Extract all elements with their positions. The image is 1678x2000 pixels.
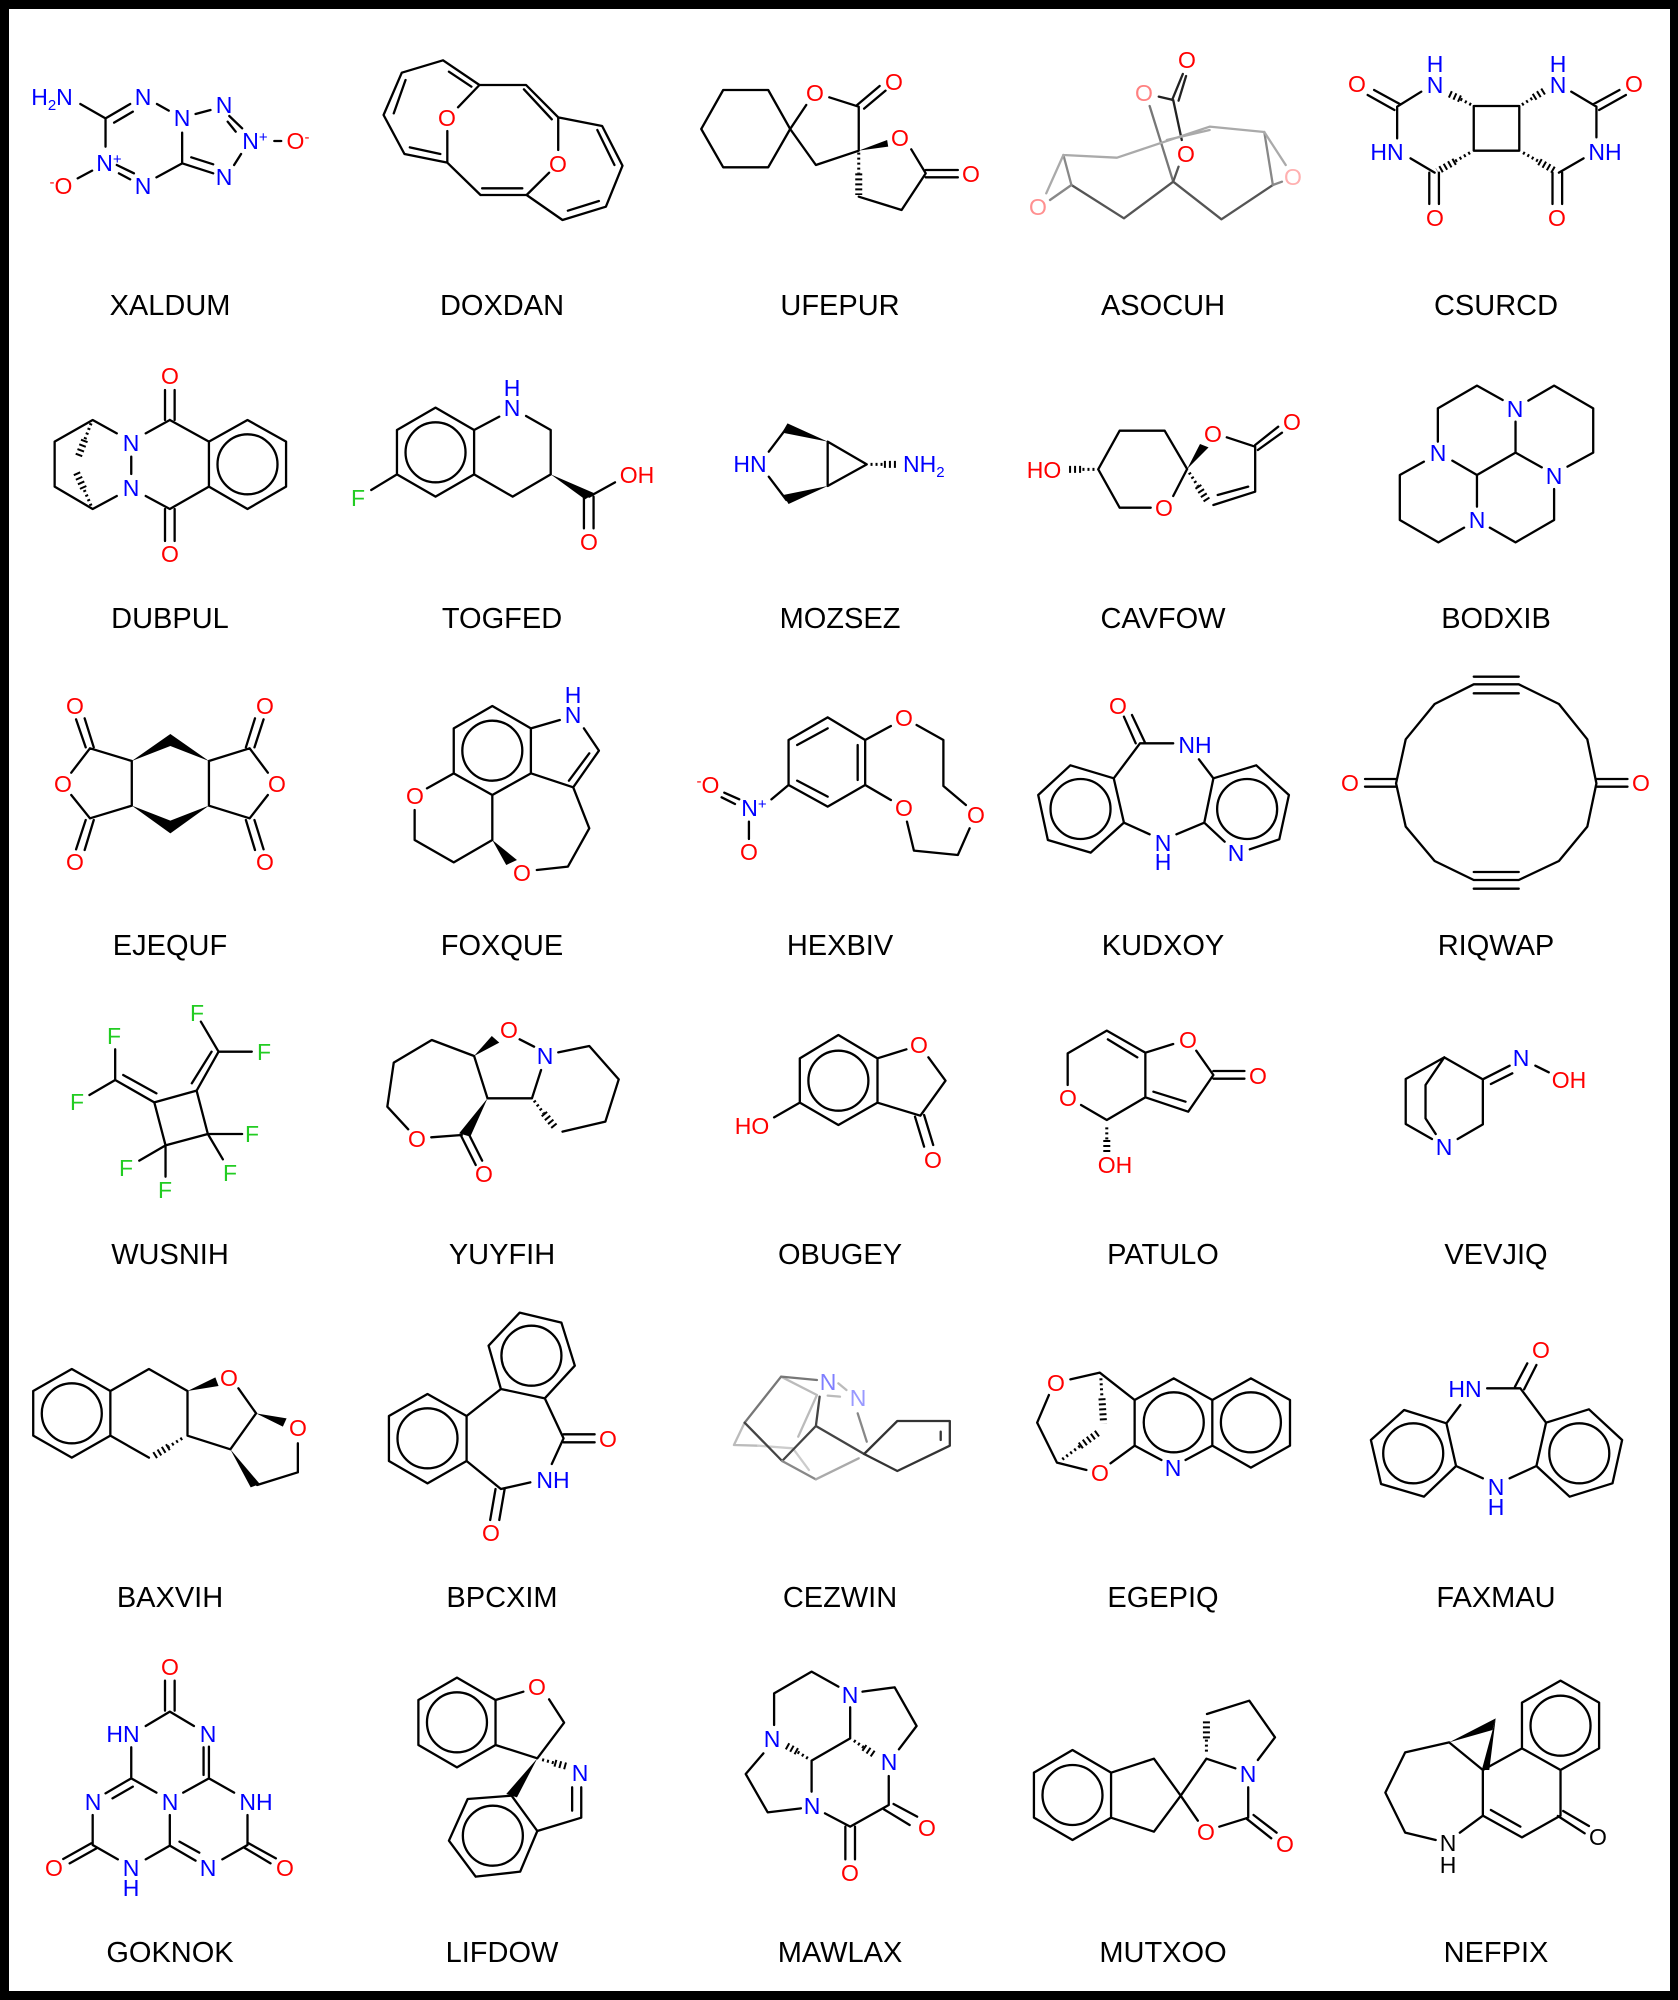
molecule structure: XALDUM: N <box>135 84 151 110</box>
molecule structure: MUTXOO <box>1034 1701 1294 1857</box>
molecule structure: MAWLAX: N <box>804 1793 820 1819</box>
molecule structure: YUYFIH: O <box>475 1161 493 1187</box>
name label: PATULO <box>1107 1239 1219 1271</box>
molecule structure: BPCXIM: NH <box>536 1467 570 1493</box>
molecule structure: OBUGEY: O <box>910 1032 928 1058</box>
molecule structure: DUBPUL: O <box>161 541 179 567</box>
molecule structure: BPCXIM: O <box>482 1520 500 1546</box>
molecule structure: BAXVIH: O <box>289 1415 307 1441</box>
molecule structure: ASOCUH <box>1029 47 1302 220</box>
name label: CAVFOW <box>1100 603 1226 635</box>
molecule structure: GOKNOK: N <box>200 1855 216 1881</box>
panel: CEZWIN <box>734 1369 950 1614</box>
molecule structure: HEXBIV: O <box>895 795 913 821</box>
molecule structure: DUBPUL: O <box>161 363 179 389</box>
name label: GOKNOK <box>106 1937 234 1969</box>
molecule structure: MUTXOO: O <box>1197 1819 1215 1845</box>
molecule structure: KUDXOY: H <box>1155 849 1171 875</box>
name label: EGEPIQ <box>1107 1582 1219 1614</box>
molecule structure: TOGFED: F <box>351 485 365 511</box>
molecule structure: CAVFOW: O <box>1204 421 1222 447</box>
molecule structure: MOZSEZ: HN <box>733 451 767 477</box>
molecule structure: WUSNIH: F <box>257 1039 271 1065</box>
name label: UFEPUR <box>780 290 900 322</box>
name label: VEVJIQ <box>1444 1239 1548 1271</box>
name label: RIQWAP <box>1438 930 1554 962</box>
molecule structure: BODXIB: N <box>1469 507 1485 533</box>
name label: KUDXOY <box>1102 930 1224 962</box>
molecule structure: CAVFOW: O <box>1155 495 1173 521</box>
molecule structure: CSURCD: N <box>1550 72 1566 98</box>
molecule structure: NEFPIX: O <box>1589 1824 1607 1850</box>
molecule structure: DUBPUL: N <box>123 475 139 501</box>
molecule structure: BODXIB <box>1400 386 1593 542</box>
molecule structure: PATULO: OH <box>1098 1152 1132 1178</box>
panel: LIFDOW <box>418 1674 588 1969</box>
molecule structure: ASOCUH: O <box>1284 164 1302 190</box>
panel: MAWLAX <box>746 1672 936 1969</box>
molecule structure: KUDXOY: O <box>1109 693 1127 719</box>
molecule structure: CSURCD: O <box>1548 205 1566 231</box>
panel: BPCXIM <box>389 1313 617 1614</box>
molecule structure: CSURCD <box>1348 51 1643 231</box>
molecule structure: TOGFED <box>351 375 654 555</box>
molecule structure: CSURCD: NH <box>1588 139 1622 165</box>
molecule structure: HEXBIV: O <box>967 802 985 828</box>
molecule structure: MAWLAX <box>746 1672 936 1886</box>
molecule structure: KUDXOY: NH <box>1178 732 1212 758</box>
molecule structure: TOGFED: H <box>504 375 520 401</box>
molecule structure: NEFPIX <box>1385 1681 1607 1878</box>
molecule structure: XALDUM: N+ <box>96 150 122 176</box>
molecule structure: ASOCUH: O <box>1178 47 1196 73</box>
molecule structure: UFEPUR: O <box>885 69 903 95</box>
panel: CSURCD <box>1348 51 1643 322</box>
molecule structure: MAWLAX: N <box>842 1682 858 1708</box>
name label: TOGFED <box>442 603 562 635</box>
molecule structure: VEVJIQ <box>1406 1045 1586 1160</box>
molecule structure: FOXQUE: H <box>565 682 581 708</box>
panel: UFEPUR <box>701 69 980 322</box>
molecule structure: NEFPIX: H <box>1440 1852 1456 1878</box>
molecule structure: HEXBIV: O <box>740 839 758 865</box>
molecule structure: VEVJIQ: N <box>1513 1045 1529 1071</box>
molecule structure: XALDUM <box>31 84 309 199</box>
molecule structure: FOXQUE: N <box>565 702 581 728</box>
molecule structure: KUDXOY: N <box>1155 830 1171 856</box>
molecule structure: YUYFIH: N <box>537 1043 553 1069</box>
panel: MUTXOO <box>1034 1701 1294 1969</box>
molecule structure: OBUGEY: HO <box>735 1113 769 1139</box>
molecule structure: XALDUM: N <box>216 92 232 118</box>
molecule structure: MAWLAX: O <box>841 1860 859 1886</box>
molecule structure: PATULO: O <box>1059 1085 1077 1111</box>
name label: EJEQUF <box>113 930 227 962</box>
molecule structure: MAWLAX: N <box>764 1726 780 1752</box>
name label: CEZWIN <box>783 1582 897 1614</box>
molecule structure: WUSNIH: F <box>70 1089 84 1115</box>
molecule structure: EGEPIQ: N <box>1165 1455 1181 1481</box>
molecule structure: OBUGEY: O <box>924 1147 942 1173</box>
molecule structure: CEZWIN: N <box>850 1385 866 1411</box>
name label: NEFPIX <box>1444 1937 1548 1969</box>
name label: DUBPUL <box>111 603 229 635</box>
name label: MUTXOO <box>1099 1937 1227 1969</box>
molecule structure: DOXDAN: O <box>438 105 456 131</box>
molecule structure: XALDUM: N <box>174 105 190 131</box>
molecule structure: GOKNOK: N <box>123 1855 139 1881</box>
molecule structure: GOKNOK: NH <box>239 1789 273 1815</box>
molecule structure: FOXQUE: O <box>513 860 531 886</box>
molecule structure: CSURCD: O <box>1625 71 1643 97</box>
molecule structure: CSURCD: H <box>1550 51 1566 77</box>
molecule structure: UFEPUR: O <box>806 80 824 106</box>
molecule structure: UFEPUR <box>701 69 980 210</box>
molecule structure: CAVFOW: O <box>1283 409 1301 435</box>
molecule structure: EJEQUF: O <box>256 849 274 875</box>
name label: BAXVIH <box>117 1582 223 1614</box>
panel: XALDUM <box>31 84 309 322</box>
name label: YUYFIH <box>449 1239 555 1271</box>
molecule structure: TOGFED: OH <box>620 462 654 488</box>
molecule structure: XALDUM: N <box>216 164 232 190</box>
molecule structure: FAXMAU: O <box>1532 1337 1550 1363</box>
molecule structure: LIFDOW <box>418 1674 588 1877</box>
molecule structure: HEXBIV: -O <box>697 772 719 798</box>
molecule structure: MOZSEZ <box>733 423 945 504</box>
panel: MOZSEZ <box>733 423 945 635</box>
panel: BODXIB <box>1400 386 1593 635</box>
panel: FOXQUE <box>406 682 599 962</box>
molecule structure: WUSNIH: F <box>245 1121 259 1147</box>
panel: FAXMAU <box>1371 1337 1622 1614</box>
molecule structure: BODXIB: N <box>1430 440 1446 466</box>
panel: KUDXOY <box>1038 693 1289 962</box>
molecule structure: TOGFED: O <box>580 529 598 555</box>
name label: CSURCD <box>1434 290 1558 322</box>
molecule structure: PATULO: O <box>1249 1063 1267 1089</box>
molecule structure: CSURCD: HN <box>1370 139 1404 165</box>
molecule structure: XALDUM: H2N <box>31 84 73 114</box>
molecule structure: DOXDAN: O <box>549 151 567 177</box>
molecule structure: FOXQUE: O <box>406 783 424 809</box>
molecule structure: EJEQUF: O <box>268 771 286 797</box>
molecule structure: FAXMAU: HN <box>1448 1376 1482 1402</box>
molecule structure: HEXBIV: N+ <box>741 795 767 821</box>
molecule structure: RIQWAP: O <box>1632 770 1650 796</box>
molecule structure: FOXQUE <box>406 682 599 886</box>
name label: FOXQUE <box>441 930 563 962</box>
molecule structure: MAWLAX: O <box>918 1815 936 1841</box>
molecule structure: XALDUM: -O <box>50 173 72 199</box>
molecule structure: CEZWIN <box>734 1369 950 1479</box>
molecule structure: WUSNIH: F <box>158 1177 172 1203</box>
panel: OBUGEY <box>735 1032 946 1271</box>
molecule structure: TOGFED: N <box>504 395 520 421</box>
panel: CAVFOW <box>1027 409 1301 635</box>
molecule structure: FAXMAU <box>1371 1337 1622 1520</box>
panel: GOKNOK <box>45 1654 294 1969</box>
name label: MOZSEZ <box>780 603 900 635</box>
molecule structure: DOXDAN <box>384 60 622 220</box>
molecule structure: EJEQUF <box>54 693 286 875</box>
molecule structure: GOKNOK: N <box>200 1721 216 1747</box>
molecule structure: RIQWAP: O <box>1341 770 1359 796</box>
name label: FAXMAU <box>1436 1582 1556 1614</box>
molecule structure: GOKNOK: N <box>85 1789 101 1815</box>
molecule structure: XALDUM: O- <box>287 128 309 154</box>
molecule structure: CEZWIN: N <box>820 1369 836 1395</box>
molecule structure: CSURCD: O <box>1348 71 1366 97</box>
panel: DOXDAN <box>384 60 622 322</box>
molecule structure: MUTXOO: N <box>1240 1761 1256 1787</box>
panel: DUBPUL <box>55 363 286 635</box>
molecule structure: HEXBIV <box>697 705 985 865</box>
molecule structure: GOKNOK: N <box>162 1789 178 1815</box>
name label: ASOCUH <box>1101 290 1225 322</box>
molecule structure: DUBPUL: N <box>123 430 139 456</box>
molecule structure: RIQWAP <box>1341 677 1650 889</box>
panel: PATULO <box>1059 1027 1267 1271</box>
molecule structure: MAWLAX: N <box>881 1749 897 1775</box>
molecule structure: GOKNOK <box>45 1654 294 1901</box>
molecule structure: GOKNOK: H <box>123 1875 139 1901</box>
molecule structure: EGEPIQ <box>1037 1370 1290 1486</box>
molecule structure: WUSNIH: F <box>107 1023 121 1049</box>
panel: VEVJIQ <box>1406 1045 1586 1271</box>
molecule structure: WUSNIH: F <box>190 1000 204 1026</box>
molecule structure: CSURCD: O <box>1426 205 1444 231</box>
molecule structure: FAXMAU: N <box>1488 1474 1504 1500</box>
panel: HEXBIV <box>697 705 985 962</box>
molecule structure: UFEPUR: O <box>962 161 980 187</box>
molecule structure: BODXIB: N <box>1507 396 1523 422</box>
molecule structure: BPCXIM <box>389 1313 617 1546</box>
molecule structure: WUSNIH: F <box>119 1155 133 1181</box>
name label: OBUGEY <box>778 1239 902 1271</box>
molecule structure: UFEPUR: O <box>891 125 909 151</box>
panel: BAXVIH <box>33 1365 307 1614</box>
molecule structure: BPCXIM: O <box>599 1426 617 1452</box>
molecule structure: XALDUM: N+ <box>242 128 268 154</box>
molecule structure: WUSNIH: F <box>223 1160 237 1186</box>
panel: NEFPIX <box>1385 1681 1607 1969</box>
molecule structure: OBUGEY <box>735 1032 946 1173</box>
molecule structure: CSURCD: N <box>1427 72 1443 98</box>
molecule structure: DUBPUL <box>55 363 286 567</box>
molecule structure: ASOCUH: O <box>1135 80 1153 106</box>
molecule structure: YUYFIH: O <box>408 1126 426 1152</box>
molecule structure: GOKNOK: HN <box>106 1721 140 1747</box>
name label: XALDUM <box>110 290 230 322</box>
molecule structure: VEVJIQ: N <box>1436 1134 1452 1160</box>
name label: BPCXIM <box>446 1582 558 1614</box>
molecule structure: KUDXOY: N <box>1228 840 1244 866</box>
molecule structure: BODXIB: N <box>1546 463 1562 489</box>
molecule structure: MOZSEZ: NH2 <box>903 451 945 481</box>
panel: ASOCUH <box>1029 47 1302 322</box>
name label: MAWLAX <box>778 1937 902 1969</box>
molecule structure: VEVJIQ: OH <box>1552 1067 1586 1093</box>
panel: EGEPIQ <box>1037 1370 1290 1614</box>
name label: LIFDOW <box>446 1937 559 1969</box>
molecule structure: EGEPIQ: O <box>1047 1370 1065 1396</box>
panel: WUSNIH <box>70 1000 271 1271</box>
panel: RIQWAP <box>1341 677 1650 962</box>
panel: YUYFIH <box>387 1017 619 1271</box>
molecule structure: KUDXOY <box>1038 693 1289 875</box>
molecule structure: YUYFIH: O <box>500 1017 518 1043</box>
name label: WUSNIH <box>111 1239 229 1271</box>
molecule structure: BAXVIH: O <box>220 1365 238 1391</box>
molecule structure: LIFDOW: N <box>572 1760 588 1786</box>
molecule structure: CAVFOW: HO <box>1027 457 1061 483</box>
molecule structure: FAXMAU: H <box>1488 1494 1504 1520</box>
molecule structure: ASOCUH: O <box>1029 194 1047 220</box>
molecule structure: PATULO <box>1059 1027 1267 1178</box>
molecule structure: YUYFIH <box>387 1017 619 1187</box>
name label: HEXBIV <box>787 930 894 962</box>
molecule structure: PATULO: O <box>1179 1027 1197 1053</box>
molecule structure: WUSNIH <box>70 1000 271 1203</box>
molecule structure: CAVFOW <box>1027 409 1301 521</box>
molecule structure: BAXVIH <box>33 1365 307 1487</box>
molecule structure: EJEQUF: O <box>66 849 84 875</box>
molecule structure: GOKNOK: O <box>161 1654 179 1680</box>
molecule structure: GOKNOK: O <box>45 1855 63 1881</box>
name label: BODXIB <box>1441 603 1551 635</box>
molecule structure: MUTXOO: O <box>1276 1831 1294 1857</box>
panel: EJEQUF <box>54 693 286 962</box>
molecule structure: GOKNOK: O <box>276 1855 294 1881</box>
molecule structure: HEXBIV: O <box>895 705 913 731</box>
molecule structure: CSURCD: H <box>1427 51 1443 77</box>
molecule structure: NEFPIX: N <box>1440 1830 1456 1856</box>
molecule structure: LIFDOW: O <box>528 1674 546 1700</box>
molecule structure: EGEPIQ: O <box>1091 1460 1109 1486</box>
molecule structure: EJEQUF: O <box>54 771 72 797</box>
panel: TOGFED <box>351 375 654 635</box>
molecule structure: EJEQUF: O <box>256 693 274 719</box>
molecule structure: ASOCUH: O <box>1177 141 1195 167</box>
name label: DOXDAN <box>440 290 564 322</box>
molecule structure: XALDUM: N <box>135 173 151 199</box>
molecule structure: EJEQUF: O <box>66 693 84 719</box>
